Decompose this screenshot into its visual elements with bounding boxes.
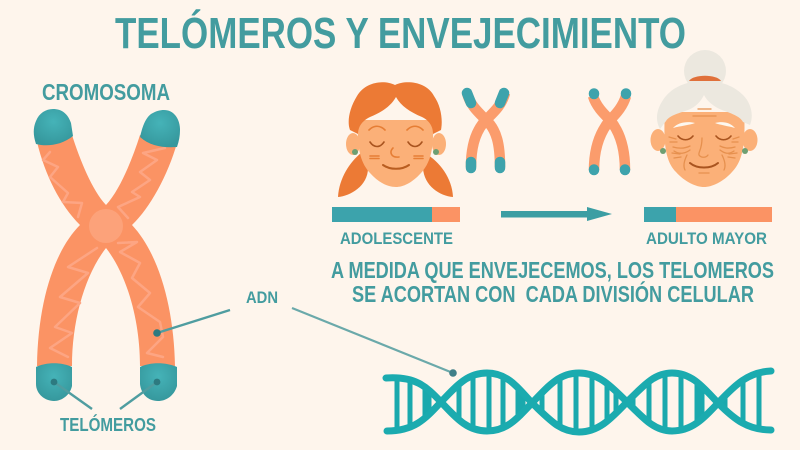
label: adolescente: ADOLESCENTE — [340, 229, 453, 248]
pointer: ADN to chromosome — [153, 310, 230, 337]
ears — [346, 133, 360, 155]
strands — [386, 371, 771, 432]
chromosome body — [37, 135, 177, 366]
DNA helix — [386, 365, 771, 440]
bar: older adult telomere length — [644, 207, 772, 222]
icon: young chromosome — [467, 93, 505, 168]
caption — [331, 257, 774, 307]
rungs — [394, 376, 762, 428]
ears — [650, 129, 666, 151]
arrow — [501, 207, 612, 221]
large chromosome — [34, 109, 180, 401]
pointer: left telomere — [51, 379, 92, 409]
earrings — [352, 149, 358, 155]
heading: cromosoma: CROMOSOMA — [42, 79, 170, 105]
label: adulto mayor: ADULTO MAYOR — [646, 229, 767, 248]
icon: elderly woman — [650, 50, 758, 187]
eyebrows — [673, 122, 735, 128]
pointer: ADN to helix — [292, 308, 457, 377]
hair band — [689, 76, 721, 81]
bar: adolescent telomere length — [332, 207, 460, 222]
face — [358, 120, 433, 187]
hair — [657, 82, 752, 129]
earrings — [660, 148, 666, 154]
telomere caps — [34, 109, 73, 145]
pointer: right telomere — [120, 379, 160, 409]
pigtails — [338, 153, 368, 197]
icon: teenage girl — [338, 82, 453, 197]
facial features — [369, 126, 423, 169]
face — [664, 112, 744, 187]
DNA squiggles — [43, 148, 165, 357]
wrinkles and features — [669, 109, 739, 173]
centromere — [89, 209, 123, 243]
bun — [684, 50, 726, 92]
hair — [349, 82, 442, 134]
ADN label: ADN — [246, 288, 278, 307]
telomeres label: TELÓMEROS — [60, 414, 156, 435]
icon: old chromosome — [593, 94, 626, 170]
